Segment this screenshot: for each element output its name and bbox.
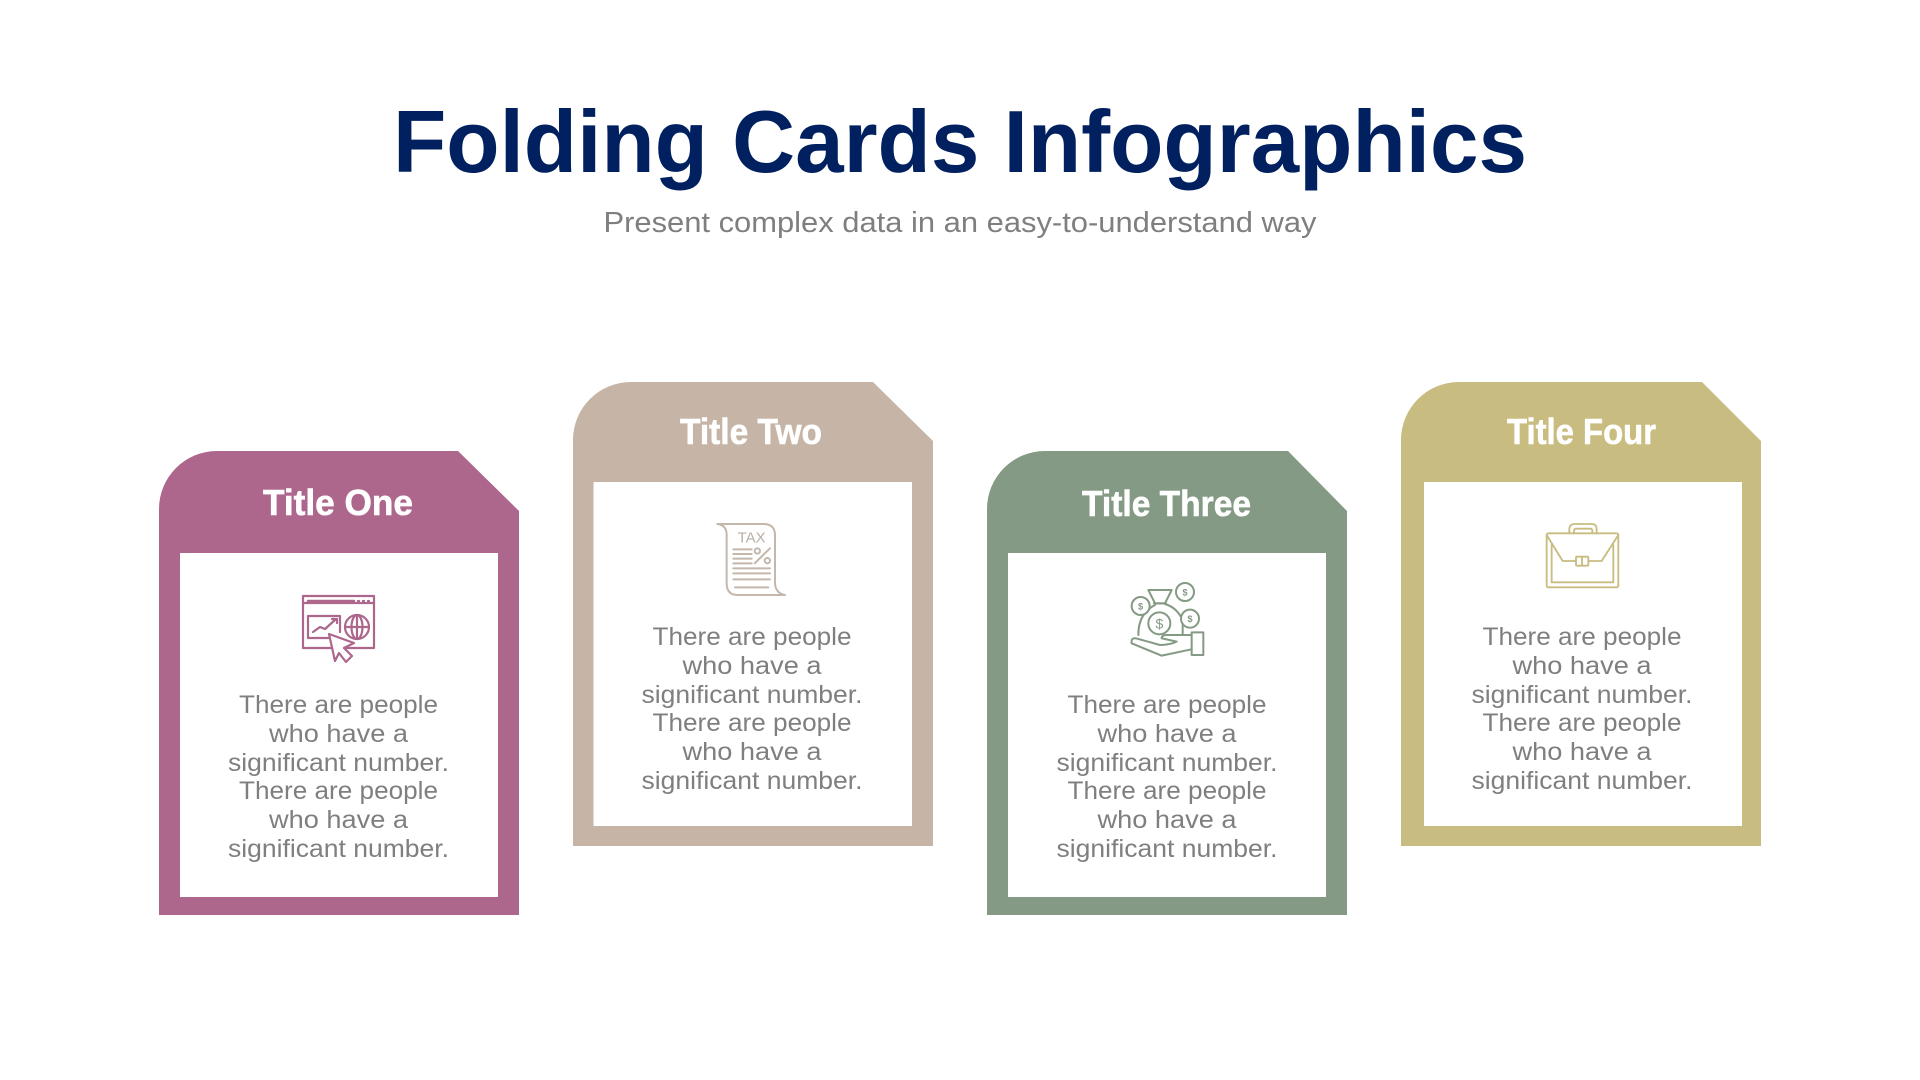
body text: significant number. xyxy=(1056,749,1278,777)
body text xyxy=(642,623,862,795)
card inner panel xyxy=(180,553,498,897)
body text: There are people xyxy=(652,709,852,737)
body text: There are people xyxy=(1482,709,1682,737)
card heading: Title Three xyxy=(1082,483,1251,524)
body text: who have a xyxy=(1511,652,1652,680)
body text: There are people xyxy=(652,623,852,651)
card: title four xyxy=(1401,382,1761,846)
body text: significant number. xyxy=(1056,835,1278,863)
icon: money bag on hand: $ xyxy=(1187,614,1193,624)
body text: There are people xyxy=(239,691,438,719)
body text xyxy=(1056,691,1278,863)
body text: who have a xyxy=(1096,720,1237,748)
card inner panel xyxy=(1008,553,1326,897)
body text: who have a xyxy=(268,806,408,834)
body text: significant number. xyxy=(642,681,862,709)
icon: money bag on hand: $ xyxy=(1138,601,1144,611)
icon: money bag on hand: $ xyxy=(1155,615,1163,631)
body text: significant number. xyxy=(1472,767,1692,795)
subtitle: Present complex data in an easy-to-understand way xyxy=(604,207,1317,239)
card: title three xyxy=(987,451,1347,915)
card shape xyxy=(987,451,1347,915)
card heading: Title One xyxy=(263,482,413,523)
card shape xyxy=(1401,382,1761,846)
card: title one xyxy=(159,451,519,915)
card shape xyxy=(573,382,933,846)
body text: who have a xyxy=(1096,806,1237,834)
body text: who have a xyxy=(681,652,822,680)
card heading: Title Four xyxy=(1507,411,1656,452)
body text: There are people xyxy=(1068,777,1266,805)
body text: There are people xyxy=(239,777,438,805)
icon: money bag on hand: $ xyxy=(1182,587,1188,597)
body text: significant number. xyxy=(228,835,449,863)
icon: briefcase xyxy=(1547,524,1618,587)
icon: browser with chart, globe and cursor xyxy=(303,596,374,662)
body text: significant number. xyxy=(642,767,862,795)
icon: tax document xyxy=(717,524,785,595)
body text xyxy=(1472,623,1692,795)
card: title two xyxy=(573,382,933,846)
icon: money bag on hand xyxy=(1132,583,1203,656)
body text: significant number. xyxy=(1472,681,1692,709)
body text: who have a xyxy=(681,738,822,766)
body text: who have a xyxy=(1511,738,1652,766)
card heading: Title Two xyxy=(680,411,822,452)
title: Folding Cards Infographics xyxy=(393,92,1527,191)
icon: tax document: TAX xyxy=(738,530,766,546)
body text: There are people xyxy=(1482,623,1682,651)
body text: significant number. xyxy=(228,749,449,777)
body text: who have a xyxy=(268,720,408,748)
card inner panel xyxy=(594,482,912,826)
body text: There are people xyxy=(1068,691,1266,719)
card inner panel xyxy=(1424,482,1742,826)
body text xyxy=(228,691,449,863)
card shape xyxy=(159,451,519,915)
